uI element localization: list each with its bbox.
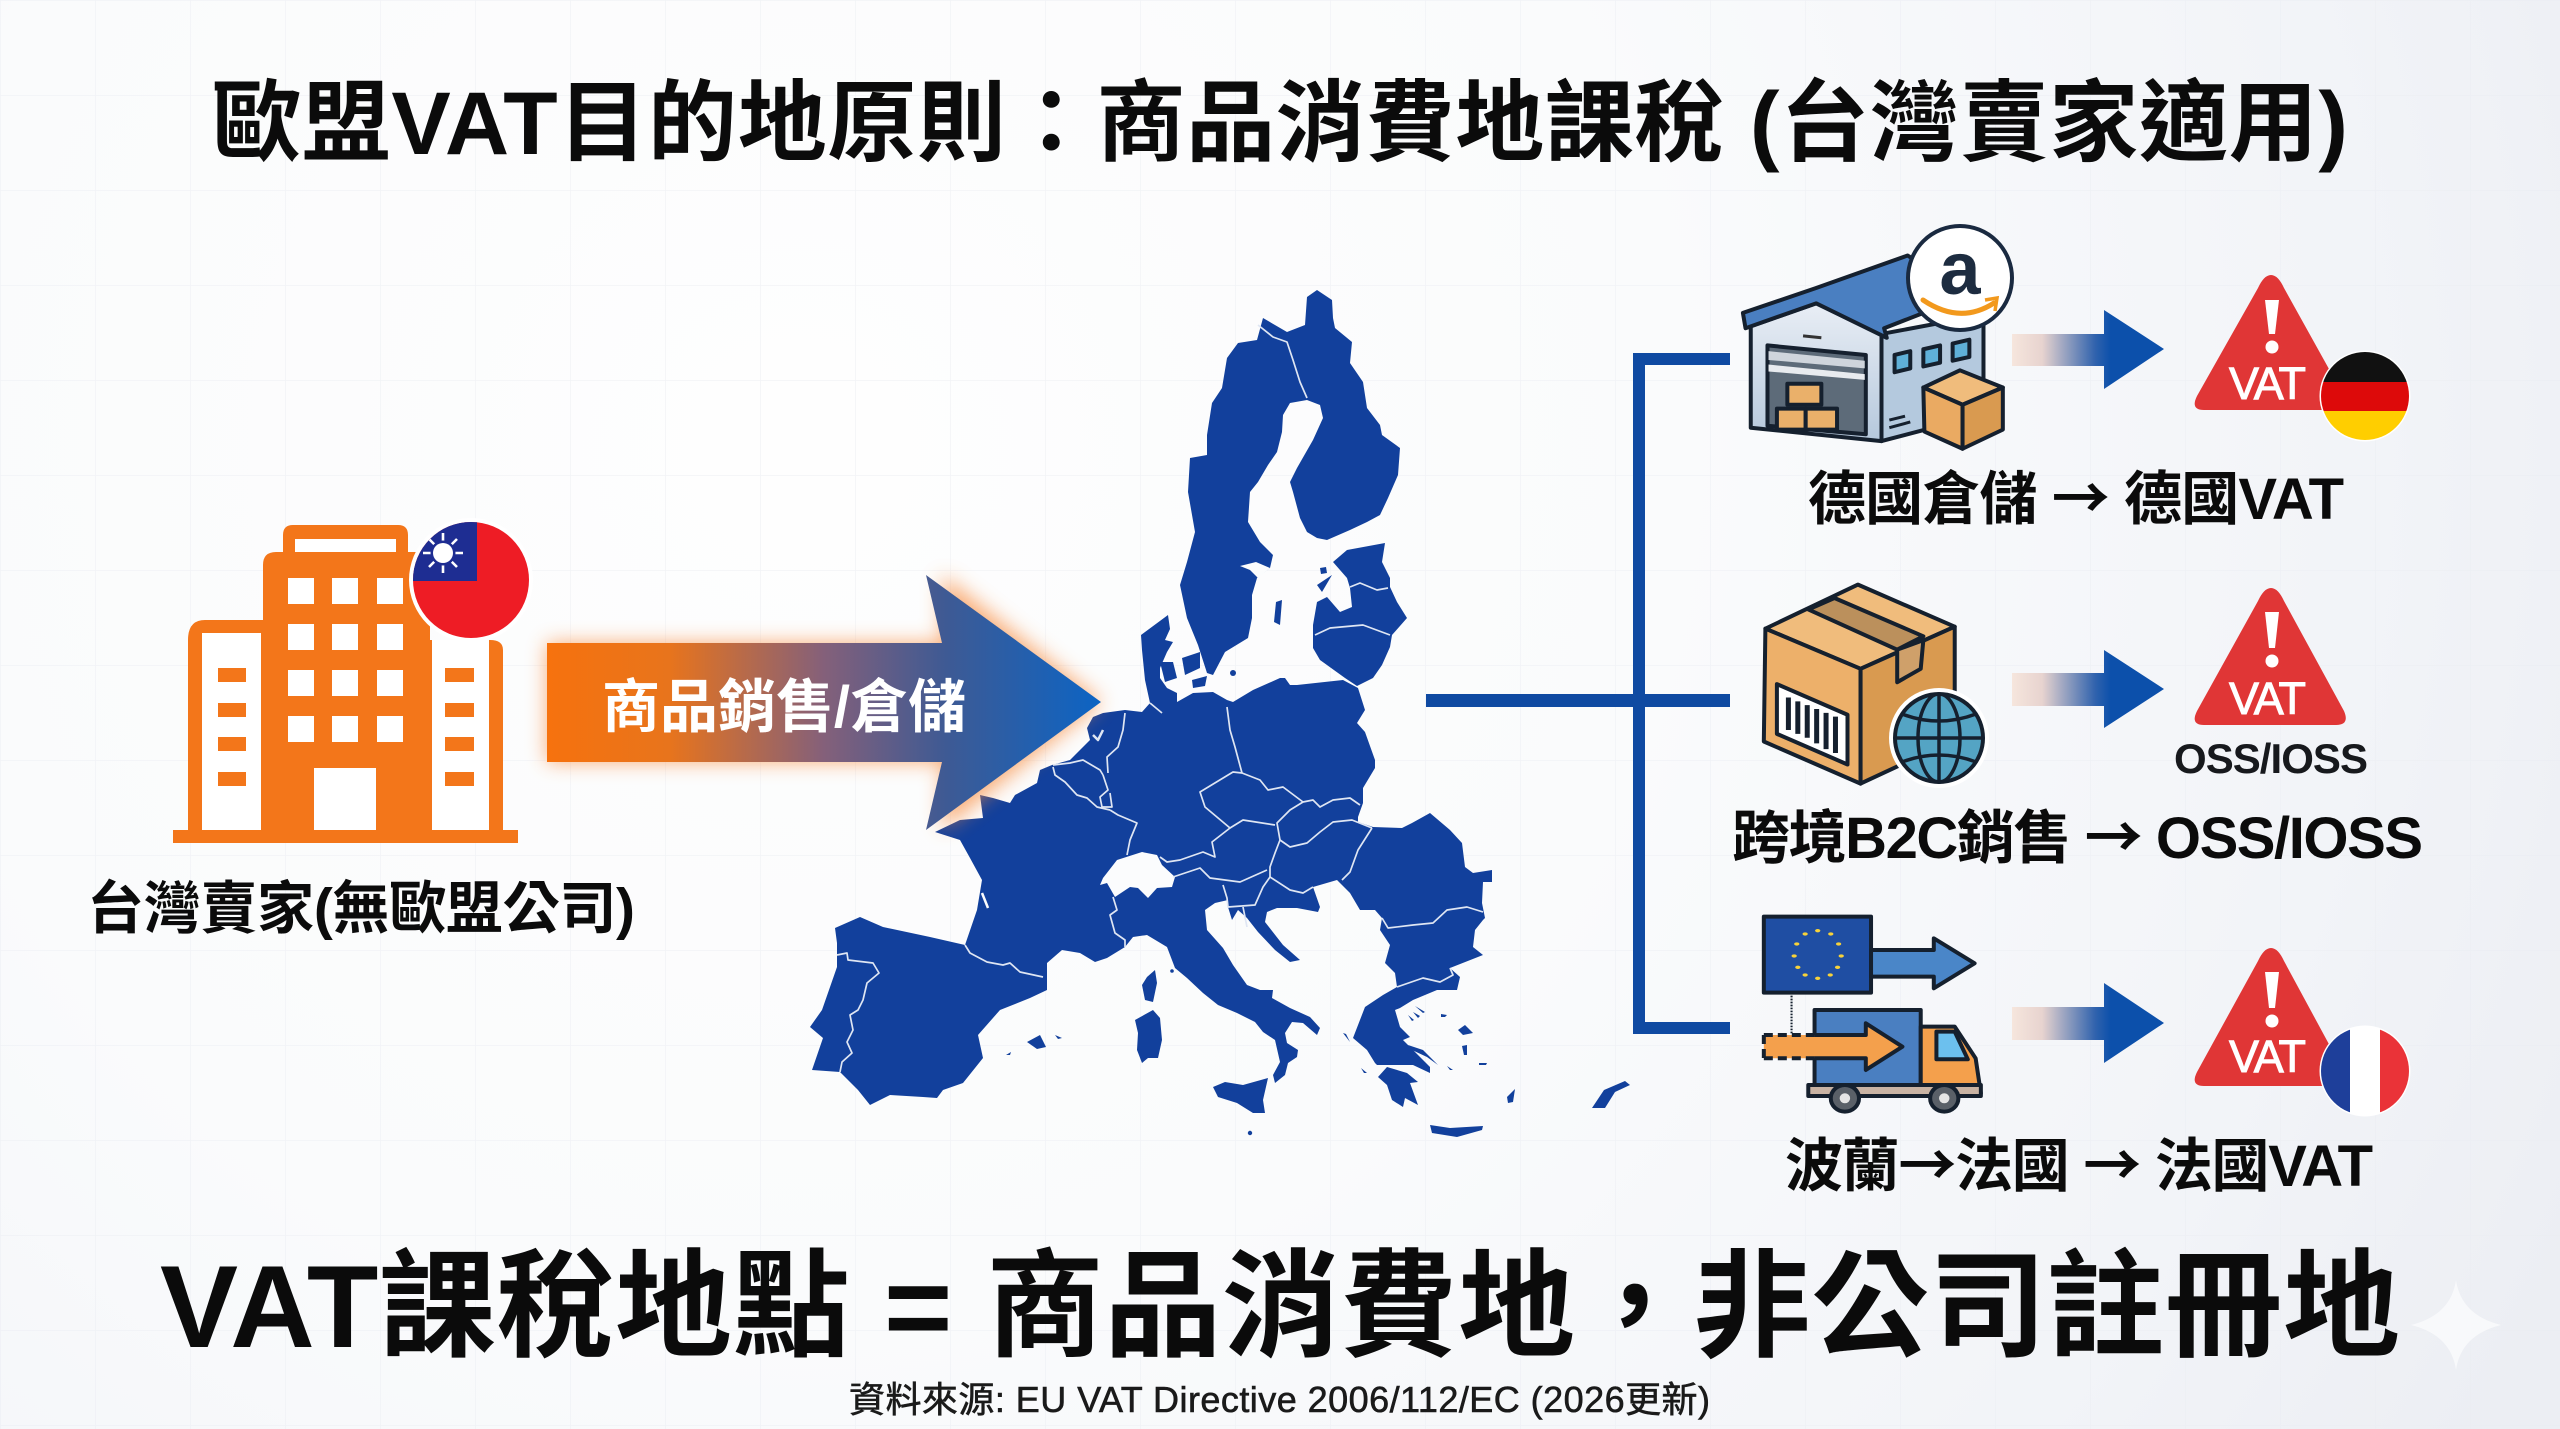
Crete [1430, 1125, 1483, 1137]
icon: warehouse with Amazon badge [1743, 226, 2012, 449]
EU map [810, 290, 1630, 1137]
Sicily [1213, 1078, 1268, 1113]
Corsica [1142, 970, 1157, 1002]
arrow: to OSS/IOSS [2012, 650, 2164, 728]
arrow: to French VAT [2012, 983, 2164, 1063]
icon: VAT warning with Germany flag [2195, 275, 2410, 443]
arrow: goods sales / warehousing [547, 575, 1101, 830]
label: Germany warehouse: 德國倉儲 → 德國VAT [1808, 452, 2344, 536]
Sweden and Finland [1180, 290, 1400, 675]
Germany flag badge [2320, 350, 2410, 443]
Cyprus [1592, 1081, 1630, 1108]
icon: VAT warning with Germany flag: VAT [2229, 358, 2306, 409]
source note: 資料來源: EU VAT Directive 2006/112/EC (2026更新) [849, 1379, 1710, 1420]
label: OSS/IOSS small: OSS/IOSS [2174, 735, 2368, 782]
arrow: goods sales / warehousing: 商品銷售/倉儲 [602, 675, 966, 740]
Switzerland (non-EU gap) [1100, 852, 1175, 898]
Baltic states [1313, 543, 1407, 686]
label: Poland to France: 波蘭→法國 → 法國VAT [1785, 1119, 2373, 1203]
Greek islands [1458, 1025, 1473, 1035]
icon: Amazon badge: a [1939, 227, 1981, 310]
sparkle watermark [2411, 1280, 2501, 1370]
icon: VAT warning OSS/IOSS [2195, 588, 2346, 725]
icon: Taiwan seller office building [173, 525, 518, 843]
Danish islands [1160, 662, 1177, 682]
Swedish lakes [1240, 562, 1270, 578]
Sardinia [1135, 1010, 1162, 1063]
Peloponnese [1378, 1067, 1418, 1107]
headline: VAT課稅地點 = 商品消費地，非公司註冊地 [160, 1241, 2400, 1372]
seller label: 台灣賣家(無歐盟公司) [87, 877, 635, 941]
icon: EU flag and truck [1764, 917, 1981, 1112]
icon: VAT warning with France flag [2195, 948, 2410, 1117]
country borders [837, 325, 1483, 1072]
arrow: to German VAT [2012, 310, 2164, 389]
icon: Taiwan flag badge [409, 518, 535, 645]
icon: VAT warning with France flag: VAT [2229, 1031, 2306, 1082]
label: cross-border B2C: 跨境B2C銷售 → OSS/IOSS [1732, 791, 2423, 875]
Baltic islands [1274, 600, 1282, 625]
connector: branching lines [1426, 353, 1730, 1034]
title: 歐盟VAT目的地原則：商品消費地課稅 (台灣賣家適用) [212, 73, 2348, 173]
icon: globe [1889, 688, 1989, 788]
Balearic islands [1027, 1035, 1046, 1049]
icon: VAT warning OSS/IOSS: VAT [2229, 673, 2306, 724]
icon: cardboard box with globe [1764, 585, 1989, 788]
France flag badge [2320, 1025, 2410, 1117]
continental Europe [810, 615, 1492, 1105]
icon: Amazon badge [1908, 226, 2012, 330]
